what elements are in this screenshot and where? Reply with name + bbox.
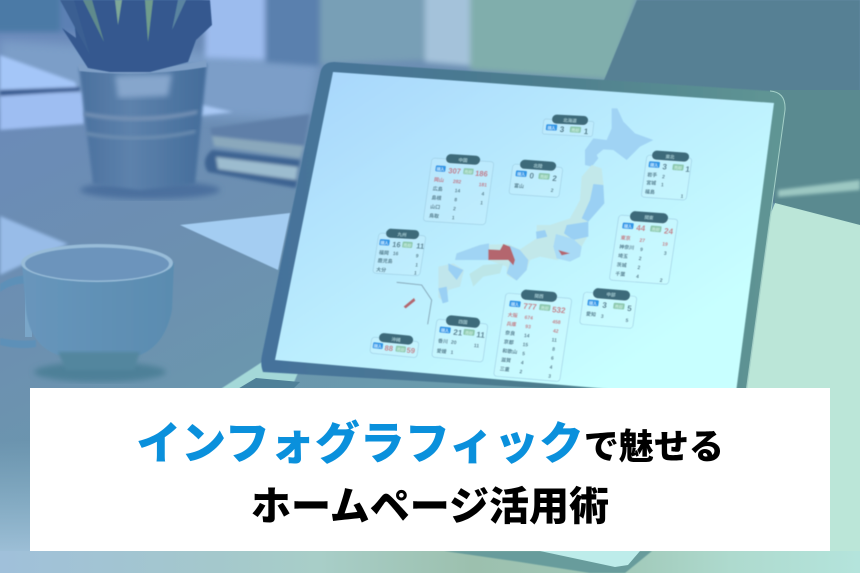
card: Kansai: 674: [524, 315, 534, 322]
Tohoku east: [582, 184, 604, 222]
card: Chugoku: 8: [454, 197, 458, 203]
card: Tohoku: 1: [685, 165, 691, 174]
card: Shikoku: 20: [451, 340, 457, 346]
card: Kanto: 4: [636, 274, 639, 280]
card: Tohoku: 1: [661, 182, 664, 188]
card: Chubu: 5: [627, 304, 633, 313]
card: Chugoku: 186: [475, 169, 488, 179]
light band on far wall: [778, 180, 860, 197]
window and wall background: [0, 0, 640, 80]
card: Kyushu: 1: [413, 270, 417, 277]
card: Kansai: 4: [520, 360, 524, 366]
card: Hokuriku: 売却: [540, 173, 549, 180]
card: Kyushu: 九州: [397, 231, 407, 238]
card: Hokuriku: 2: [550, 188, 554, 194]
red highlight Tokyo: [558, 250, 570, 255]
card: Hokkaido: 購入: [547, 124, 556, 131]
card: Kansai: 奈良: [505, 329, 516, 337]
card: Shikoku: 購入: [441, 327, 450, 333]
card: Kyushu: 16: [392, 240, 401, 249]
card: Kanto: 購入: [624, 223, 632, 229]
card: Kansai: 15: [522, 342, 529, 349]
title line 1: インフォグラフィックで魅せる: [136, 418, 724, 469]
card: Kansai: 6: [550, 356, 554, 362]
card: Kanto: 千葉: [615, 270, 626, 278]
card: Chugoku: [423, 153, 495, 225]
card: Chugoku: 14: [454, 188, 461, 195]
card: Kyushu: [372, 228, 427, 277]
card: Tohoku: 2: [662, 174, 665, 180]
card: Kansai: 和歌山: [502, 347, 518, 356]
card: Kanto: 3: [663, 251, 667, 257]
red highlight Kansai: [488, 244, 515, 265]
card: Hokkaido: [542, 114, 595, 136]
card: Kanto: [609, 210, 679, 284]
card: Kanto: 茨城: [616, 261, 627, 269]
card: Okinawa: 購入: [373, 342, 382, 349]
card: Shikoku: [432, 314, 489, 362]
card: Kanto: 2: [659, 278, 663, 284]
card: Kanto: 9: [640, 247, 643, 253]
card: Chugoku: 181: [478, 182, 488, 189]
card: Shikoku: 売却: [465, 329, 474, 336]
card: Chubu: 愛知: [586, 310, 596, 318]
card: Kyushu: 11: [416, 241, 425, 251]
card: Kansai: 2: [519, 369, 523, 375]
card: Kyushu: 売却: [403, 242, 412, 248]
bottom desk strip: [0, 551, 860, 573]
card: Hokuriku: 2: [552, 174, 558, 183]
laptop shadow at bottom: [444, 551, 652, 573]
card: Chugoku: 島根: [431, 194, 442, 202]
card: Hokuriku: [509, 159, 564, 198]
Kanto south: [553, 234, 582, 262]
card: Chubu: 3: [602, 301, 608, 310]
card: Kansai: 14: [523, 333, 530, 340]
bezel highlight: [745, 91, 785, 400]
Japan map: [397, 108, 653, 324]
screen content: map and cards: [370, 108, 693, 382]
card: Kansai: 532: [551, 305, 567, 315]
card: Chugoku: 中国: [458, 156, 468, 164]
card: Kanto: 2: [638, 256, 642, 262]
card: Chugoku: 購入: [436, 165, 445, 172]
card: Kansai: 458: [552, 319, 561, 326]
card: Kyushu: 福岡: [378, 249, 389, 257]
dark wall right: [600, 0, 860, 225]
card: Chubu: [580, 287, 638, 329]
Hokkaido: [585, 108, 653, 167]
card: Hokkaido: 売却: [571, 126, 580, 133]
card: Tohoku: 東北: [665, 153, 675, 161]
left desk fade: [0, 440, 30, 551]
card: Hokuriku: 0: [529, 171, 535, 181]
lighter far desk: [0, 40, 320, 120]
laptop corner at bottom: [540, 551, 640, 567]
Kinki: [507, 245, 528, 281]
card: Kyushu: 9: [415, 253, 419, 260]
card: Chugoku: 1: [451, 215, 455, 221]
card: Kansai: 8: [552, 347, 556, 353]
card: Shikoku: 11: [473, 343, 480, 350]
card: Okinawa: 沖縄: [391, 336, 401, 344]
card: Chubu: 3: [600, 314, 604, 320]
card: Kansai: 4: [549, 365, 553, 371]
card: Kanto: 神奈川: [619, 243, 635, 251]
card: Shikoku: 四国: [458, 319, 468, 326]
card: Tohoku: 宮城: [646, 179, 657, 187]
laptop bezel: [261, 62, 785, 400]
card: Chugoku: 売却: [464, 168, 473, 175]
card: Okinawa: 59: [406, 346, 416, 355]
title panel: [30, 388, 830, 551]
card: Kansai: 滋賀: [501, 356, 512, 364]
card: Kansai: 兵庫: [506, 320, 517, 328]
title line 2: ホームページ活用術: [251, 485, 609, 529]
card: Kansai: 3: [548, 374, 552, 380]
card: Tohoku: 売却: [674, 164, 683, 171]
notebooks: [205, 114, 310, 188]
card: Kansai: 5: [522, 351, 526, 357]
card: Hokkaido: 北海道: [563, 117, 578, 124]
card: Kansai: 関西: [534, 292, 544, 300]
card: Chugoku: 山口: [430, 203, 441, 211]
card: Shikoku: 21: [453, 328, 463, 338]
Shikoku: [469, 263, 503, 287]
card: Chugoku: 307: [448, 166, 462, 176]
card: Tohoku: 購入: [650, 161, 659, 168]
card: Kanto: 売却: [651, 226, 660, 232]
card: Shikoku: 香川: [438, 337, 448, 345]
card: Kansai: 42: [552, 328, 559, 335]
card: Hokuriku: 北陸: [533, 162, 543, 170]
card: Kanto: 東京: [620, 234, 631, 242]
laptop screen: [275, 72, 774, 400]
card: Okinawa: 88: [384, 343, 394, 353]
card: Kansai: 777: [523, 302, 538, 312]
card: Kanto: 埼玉: [617, 252, 628, 260]
card: Shikoku: 1: [450, 350, 454, 356]
card: Kanto: 2: [637, 265, 641, 271]
card: Hokkaido: 1: [583, 127, 589, 136]
card: Kanto: 24: [663, 227, 674, 236]
card: Chugoku: 鳥取: [428, 212, 439, 220]
card: Chubu: 5: [625, 318, 629, 324]
paper sheet beside laptop: [180, 213, 290, 270]
card: Chugoku: 2: [453, 206, 456, 212]
papers on desk: [0, 55, 233, 275]
card: Hokkaido: 3: [559, 125, 565, 134]
card: Chugoku: 4: [481, 191, 485, 198]
card: Kyushu: 16: [392, 251, 399, 257]
coffee cup: [0, 244, 174, 382]
card: Kyushu: 鹿児島: [377, 257, 393, 265]
card: Kanto: 19: [662, 242, 668, 248]
card: Kanto: 44: [636, 223, 646, 233]
card: Chubu: 購入: [589, 300, 598, 306]
Kyushu: [438, 263, 464, 303]
card: Kansai: [494, 288, 573, 382]
card: Tohoku: 岩手: [647, 171, 658, 179]
card: Kyushu: 大分: [376, 266, 387, 274]
card: Tohoku: [641, 150, 693, 200]
red highlight Okinawa: [404, 298, 415, 308]
card: Kansai: 売却: [540, 304, 549, 311]
card: Tohoku: 福島: [644, 188, 655, 196]
card: Kansai: 93: [525, 324, 531, 331]
card: Kansai: 11: [551, 337, 557, 344]
card: Tohoku: 1: [680, 194, 684, 200]
card: Chubu: 中部: [606, 291, 616, 299]
card: Kanto: 27: [639, 238, 646, 244]
plant leaves: [60, 0, 212, 72]
Kanto north: [564, 222, 588, 240]
card: Kanto: 関東: [644, 214, 654, 222]
card: Kansai: 京都: [503, 338, 514, 346]
Honshu base: [455, 165, 604, 281]
card: Chugoku: 282: [452, 179, 462, 186]
card: Chugoku: 1: [480, 200, 484, 207]
card: Shikoku: 11: [476, 330, 486, 340]
card: Kyushu: 1: [415, 262, 419, 269]
card: Kansai: 購入: [511, 301, 519, 307]
light desk right: [640, 203, 860, 573]
Noto: [536, 230, 547, 239]
card: Chubu: 売却: [615, 303, 623, 309]
card: Kyushu: 購入: [380, 239, 389, 246]
Okinawa inset line: [397, 282, 432, 324]
card: Shikoku: 愛媛: [436, 347, 447, 355]
card: Chugoku: 広島: [432, 185, 443, 193]
card: Tohoku: 3: [662, 162, 668, 172]
card: Chugoku: 岡山: [434, 176, 444, 184]
laptop keyboard base: [216, 362, 300, 392]
card: Okinawa: [370, 332, 420, 358]
card: Hokuriku: 購入: [517, 170, 526, 177]
card: Kansai: 大阪: [507, 311, 518, 319]
Chugoku: [455, 243, 489, 260]
plant pot: [60, 0, 220, 199]
card: Kansai: 三重: [499, 365, 510, 373]
card: Hokuriku: 富山: [514, 182, 524, 190]
card: Okinawa: 売却: [396, 346, 405, 352]
